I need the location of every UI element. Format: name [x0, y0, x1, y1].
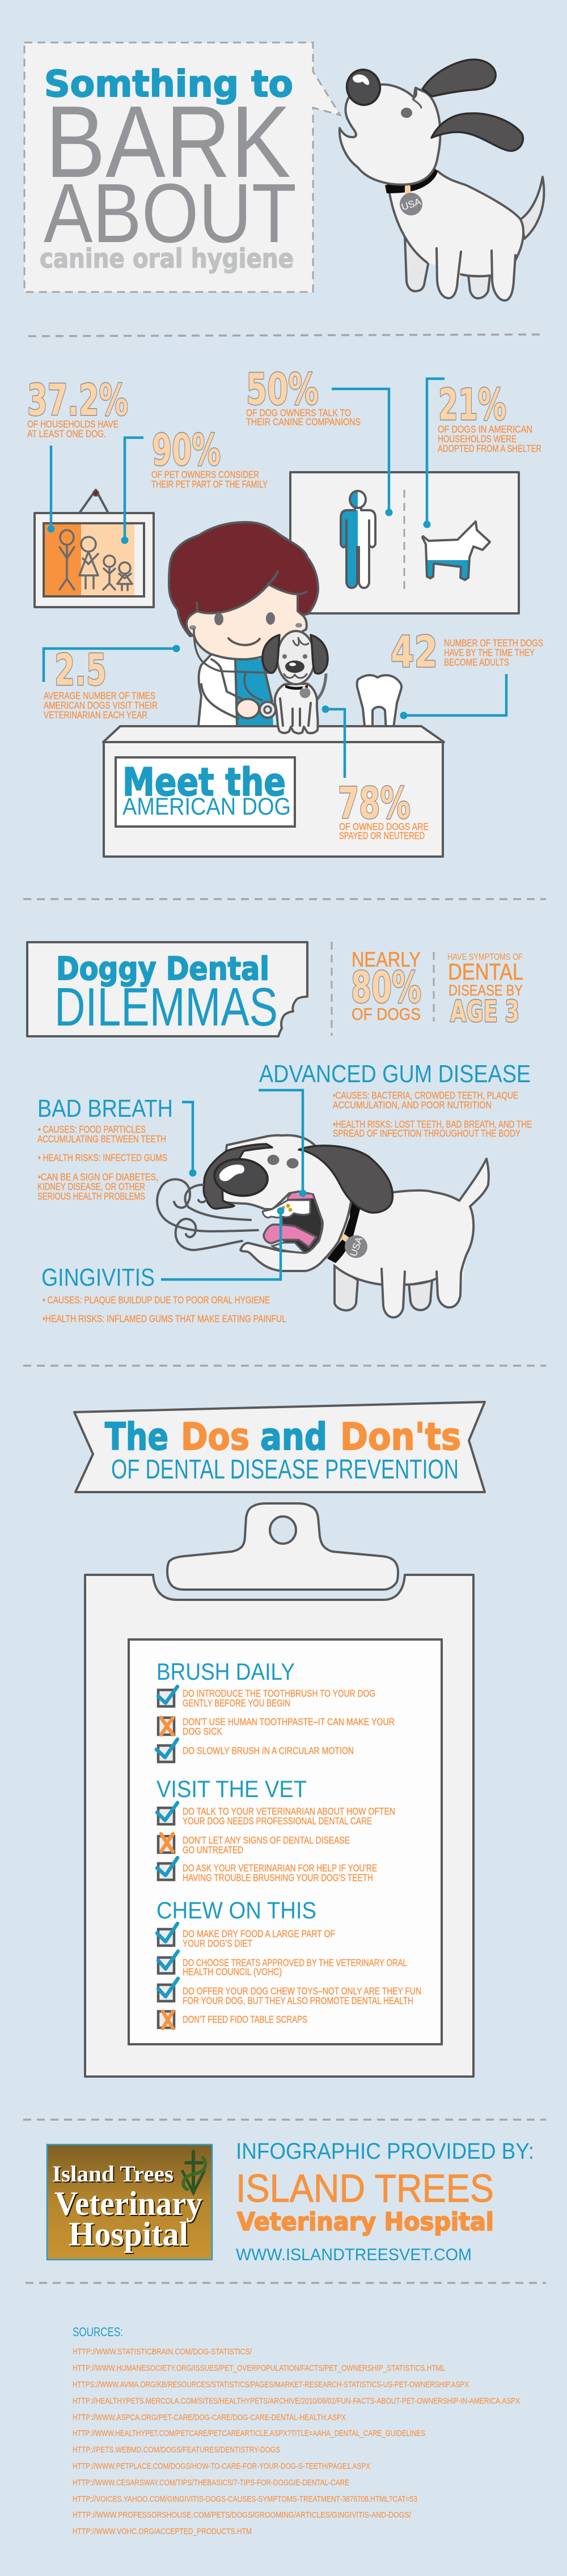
banner: dos and don'ts: and	[260, 1415, 327, 1459]
stat: 90%: THEIR PET PART OF THE FAMILY	[151, 478, 268, 490]
stat: symptoms by age 3: DISEASE BY	[448, 982, 523, 999]
credit text block: Veterinary Hospital	[237, 2208, 494, 2236]
stat: 21%: HOUSEHOLDS WERE	[438, 433, 517, 444]
stat: 42	[391, 626, 543, 677]
block: Advanced Gum Disease: •CAUSES: BACTERIA, CROWDED TEETH, PLAQUE	[333, 1090, 518, 1101]
arrow: 2.5 to vet	[44, 645, 180, 682]
collar and tag	[327, 1198, 360, 1263]
picture frame	[35, 490, 154, 607]
title line: ABOUT: ABOUT	[44, 167, 297, 260]
arrow: 42 to tooth	[400, 674, 506, 719]
sources list: HTTP://WWW.ASPCA.ORG/PET-CARE/DOG-CARE/DOG-CARE-DENTAL-HEALTH.ASPX	[73, 2413, 346, 2422]
section: Visit the Vet: YOUR DOG NEEDS PROFESSIONAL DENTAL CARE	[183, 1815, 372, 1827]
stat: 37.2%	[27, 375, 128, 439]
sources list: HTTPS://WWW.AVMA.ORG/KB/RESOURCES/STATISTICS/PAGES/MARKET-RESEARCH-STATISTICS-US-PET-OWNERSHIP.ASPX	[73, 2380, 469, 2389]
wall chart panel	[290, 472, 519, 613]
stat: 50%: 50%	[246, 364, 319, 414]
stat: 90%: 90%	[152, 425, 221, 475]
section: Brush Daily: BRUSH DAILY	[156, 1658, 295, 1685]
arrow: gingivitis	[161, 1208, 285, 1279]
stat: 2.5: AVERAGE NUMBER OF TIMES	[44, 690, 155, 701]
paper checklist	[129, 1639, 442, 2044]
stethoscope	[194, 629, 276, 718]
clipboard clip	[167, 1503, 398, 1590]
section: Chew on This: YOUR DOG'S DIET	[183, 1938, 252, 1949]
mouth	[282, 1194, 322, 1253]
stat: symptoms by age 3	[447, 952, 523, 1029]
stat: 78%: 78%	[338, 778, 411, 828]
section: Chew on This: DO CHOOSE TREATS APPROVED BY THE VETERINARY ORAL	[183, 1957, 407, 1968]
heading panel: Doggy Dental Dilemmas: Doggy Dental	[56, 951, 269, 988]
stat: 2.5	[44, 645, 158, 721]
section: Visit the Vet: DON'T LET ANY SIGNS OF DENTAL DISEASE	[183, 1834, 350, 1846]
stat: 37.2%: AT LEAST ONE DOG.	[27, 428, 106, 439]
credit text block: ISLAND TREES	[236, 2166, 494, 2210]
logo: Island Trees Veterinary Hospital: Veterinary	[54, 2185, 202, 2222]
credit text block: WWW.ISLANDTREESVET.COM	[236, 2245, 472, 2264]
breath swirls	[157, 1179, 258, 1250]
section: Chew on This: FOR YOUR DOG, BUT THEY ALSO PROMOTE DENTAL HEALTH	[183, 1995, 413, 2006]
stat: 42: 42	[391, 626, 438, 677]
stat: 2.5: AMERICAN DOGS VISIT THEIR	[44, 700, 158, 711]
arrow: 78% to small dog	[322, 705, 345, 778]
section: Chew on This: DO OFFER YOUR DOG CHEW TOYS–NOT ONLY ARE THEY FUN	[183, 1985, 421, 1997]
stat: nearly 80% of dogs: OF DOGS	[352, 1005, 421, 1024]
sources list	[73, 2325, 520, 2536]
sources list: HTTP://WWW.PROFESSORSHOUSE.COM/PETS/DOGS/GROOMING/ARTICLES/GINGIVITIS-AND-DOGS/	[73, 2510, 412, 2520]
logo: Island Trees Veterinary Hospital: Island Trees	[52, 2161, 174, 2187]
block: Bad Breath	[37, 1095, 173, 1202]
illustration: vet	[169, 522, 318, 727]
section: Chew on This: DO MAKE DRY FOOD A LARGE PART OF	[183, 1928, 335, 1939]
arrow: advanced gum disease	[259, 1090, 306, 1197]
arrow: bad breath	[182, 1102, 196, 1177]
section: Chew on This: DON'T FEED FIDO TABLE SCRAPS	[183, 2014, 307, 2025]
stat: 78%: SPAYED OR NEUTERED	[339, 830, 425, 841]
banner: dos and don'ts: The	[105, 1415, 168, 1459]
section: Brush Daily: GENTLY BEFORE YOU BEGIN	[183, 1697, 290, 1709]
block: Gingivitis: •HEALTH RISKS: INFLAMED GUMS THAT MAKE EATING PAINFUL	[43, 1313, 286, 1324]
sign: Meet the American Dog	[116, 757, 295, 827]
stat: 21%: 21%	[438, 379, 506, 430]
sources list: HTTP://WWW.HEALTHYPET.COM/PETCARE/PETCAREARTICLE.ASPX?TITLE=AAHA_DENTAL_CARE_GUIDELINES	[73, 2429, 425, 2438]
section: Visit the Vet	[156, 1776, 395, 1883]
stat: 2.5: VETERINARIAN EACH YEAR	[44, 709, 147, 721]
title line: BARK: BARK	[45, 85, 291, 199]
sources list: HTTP://WWW.CESARSWAY.COM/TIPS/THEBASICS/7-TIPS-FOR-DOGGIE-DENTAL-CARE	[73, 2478, 349, 2488]
block: Bad Breath: BAD BREATH	[37, 1095, 173, 1122]
stat: 21%	[438, 379, 541, 454]
heading panel: Doggy Dental Dilemmas: DILEMMAS	[54, 977, 278, 1037]
section: Brush Daily: DO SLOWLY BRUSH IN A CIRCULAR MOTION	[183, 1745, 354, 1756]
section: Visit the Vet: HAVING TROUBLE BRUSHING YOUR DOG'S TEETH	[183, 1872, 373, 1883]
stat: nearly 80% of dogs	[351, 948, 421, 1024]
sign: Meet the American Dog: Meet the	[122, 760, 286, 805]
block: Advanced Gum Disease: SPREAD OF INFECTION THROUGHOUT THE BODY	[333, 1128, 521, 1139]
section: Chew on This: CHEW ON THIS	[156, 1897, 316, 1923]
sources list: HTTP://PETS.WEBMD.COM/DOGS/FEATURES/DENTISTRY-DOGS	[73, 2445, 280, 2455]
block: Bad Breath: KIDNEY DISEASE, OR OTHER	[37, 1181, 145, 1192]
section: Brush Daily: DON'T USE HUMAN TOOTHPASTE–IT CAN MAKE YOUR	[183, 1716, 395, 1727]
exam table	[103, 726, 444, 857]
stat: 90%: OF PET OWNERS CONSIDER	[151, 469, 259, 480]
banner: dos and don'ts: OF DENTAL DISEASE PREVENTION	[111, 1455, 459, 1485]
block: Advanced Gum Disease: ACCUMULATION, AND POOR NUTRITION	[333, 1099, 492, 1111]
stick figure family	[60, 530, 132, 590]
illustration: barking dog	[340, 60, 544, 300]
stat: 90%	[151, 425, 268, 490]
banner: dos and don'ts: Don'ts	[340, 1415, 461, 1459]
illustration: dog with open mouth	[157, 1136, 489, 1317]
icon: dog, partly filled	[422, 522, 490, 580]
block: Bad Breath: ACCUMULATING BETWEEN TEETH	[37, 1133, 166, 1145]
section: Visit the Vet: DO TALK TO YOUR VETERINARIAN ABOUT HOW OFTEN	[183, 1806, 395, 1817]
logo: Island Trees Veterinary Hospital	[47, 2145, 212, 2260]
section: Visit the Vet: GO UNTREATED	[183, 1844, 243, 1855]
sources list: HTTP://WWW.VOHC.ORG/ACCEPTED_PRODUCTS.HTM	[73, 2527, 252, 2536]
logo: Island Trees Veterinary Hospital: Hospital	[69, 2215, 188, 2253]
banner: dos and don'ts: Dos	[181, 1415, 249, 1459]
icon: human, half filled	[341, 491, 375, 588]
clipboard	[85, 1503, 473, 2077]
title line: Somthing to: Somthing to	[44, 63, 293, 105]
stat: symptoms by age 3: DENTAL	[448, 959, 523, 985]
stat: 42: NUMBER OF TEETH DOGS	[444, 637, 543, 649]
stat: 50%: THEIR CANINE COMPANIONS	[246, 416, 361, 427]
section: Chew on This	[156, 1897, 421, 2028]
section: Visit the Vet: DO ASK YOUR VETERINARIAN FOR HELP IF YOU'RE	[183, 1862, 377, 1874]
block: Bad Breath: •CAN BE A SIGN OF DIABETES,	[38, 1171, 158, 1183]
stat: 42: BECOME ADULTS	[444, 656, 509, 668]
arrow: 37.2% to picture	[48, 446, 54, 533]
icon: veterinary caduceus	[183, 2151, 205, 2193]
section: Chew on This: HEALTH COUNCIL (VOHC)	[183, 1966, 282, 1977]
title panel: speech bubble	[24, 43, 340, 292]
head	[221, 1136, 352, 1271]
banner: dos and don'ts	[74, 1402, 485, 1492]
sources list: HTTP://VOICES.YAHOO.COM/GINGIVITIS-DOGS-CAUSES-SYMPTOMS-TREATMENT-3876708.HTML?CAT=53	[73, 2494, 417, 2504]
illustration: small dog on table	[263, 631, 328, 734]
credit text block	[236, 2139, 534, 2264]
section: Brush Daily: DOG SICK	[183, 1726, 222, 1737]
block: Bad Breath: SERIOUS HEALTH PROBLEMS	[37, 1190, 145, 1202]
head details	[238, 1143, 284, 1185]
section: Brush Daily	[156, 1658, 395, 1762]
stat: symptoms by age 3: HAVE SYMPTOMS OF	[447, 952, 523, 962]
sources list: HTTP://WWW.PETPLACE.COM/DOGS/HOW-TO-CARE-FOR-YOUR-DOG-S-TEETH/PAGE1.ASPX	[73, 2461, 370, 2471]
stat: 2.5: 2.5	[54, 645, 107, 695]
stat: 42: HAVE BY THE TIME THEY	[444, 647, 535, 658]
block: Gingivitis: • CAUSES: PLAQUE BUILDUP DUE TO POOR ORAL HYGIENE	[43, 1294, 270, 1306]
arrow: 90% to picture	[121, 438, 143, 544]
arrow: 50% to human icon	[332, 389, 392, 516]
block: Bad Breath: • CAUSES: FOOD PARTICLES	[38, 1124, 146, 1135]
stat: 78%: OF OWNED DOGS ARE	[339, 821, 429, 832]
stat: 37.2%: OF HOUSEHOLDS HAVE	[27, 418, 119, 430]
block: Bad Breath: • HEALTH RISKS: INFECTED GUMS	[38, 1152, 167, 1163]
sign: Meet the American Dog: AMERICAN DOG	[122, 793, 291, 820]
block: Gingivitis: GINGIVITIS	[41, 1264, 155, 1291]
block: Advanced Gum Disease	[259, 1060, 532, 1139]
sources list: HTTP://WWW.STATISTICBRAIN.COM/DOG-STATISTICS/	[73, 2347, 252, 2357]
illustration: barking dog: USA	[400, 196, 422, 213]
stat: 37.2%: 37.2%	[27, 375, 128, 425]
body and tail	[335, 1159, 489, 1317]
block: Advanced Gum Disease: ADVANCED GUM DISEASE	[259, 1060, 531, 1088]
block: Gingivitis	[41, 1264, 286, 1324]
stat: nearly 80% of dogs: 80%	[351, 962, 421, 1012]
subtitle: canine oral hygiene	[40, 243, 294, 274]
sources list: SOURCES:	[73, 2325, 123, 2339]
sources list: HTTP://WWW.HUMANESOCIETY.ORG/ISSUES/PET_OVERPOPULATION/FACTS/PET_OWNERSHIP_STATISTICS.HTML	[73, 2363, 445, 2373]
illustration: tooth	[357, 675, 401, 734]
stat: symptoms by age 3: AGE 3	[450, 995, 519, 1029]
heading panel: Doggy Dental Dilemmas	[27, 942, 307, 1037]
section: Visit the Vet: VISIT THE VET	[156, 1776, 307, 1802]
stat: nearly 80% of dogs: NEARLY	[352, 948, 421, 971]
credit text block: INFOGRAPHIC PROVIDED BY:	[236, 2139, 534, 2164]
stat: 50%: OF DOG OWNERS TALK TO	[246, 407, 351, 418]
arrow: 21% to dog icon	[423, 379, 445, 528]
stat: 21%: OF DOGS IN AMERICAN	[438, 423, 532, 435]
far legs	[335, 1266, 358, 1310]
illustration: dog with open mouth: USA	[348, 1235, 365, 1258]
section: Brush Daily: DO INTRODUCE THE TOOTHBRUSH TO YOUR DOG	[183, 1688, 375, 1699]
